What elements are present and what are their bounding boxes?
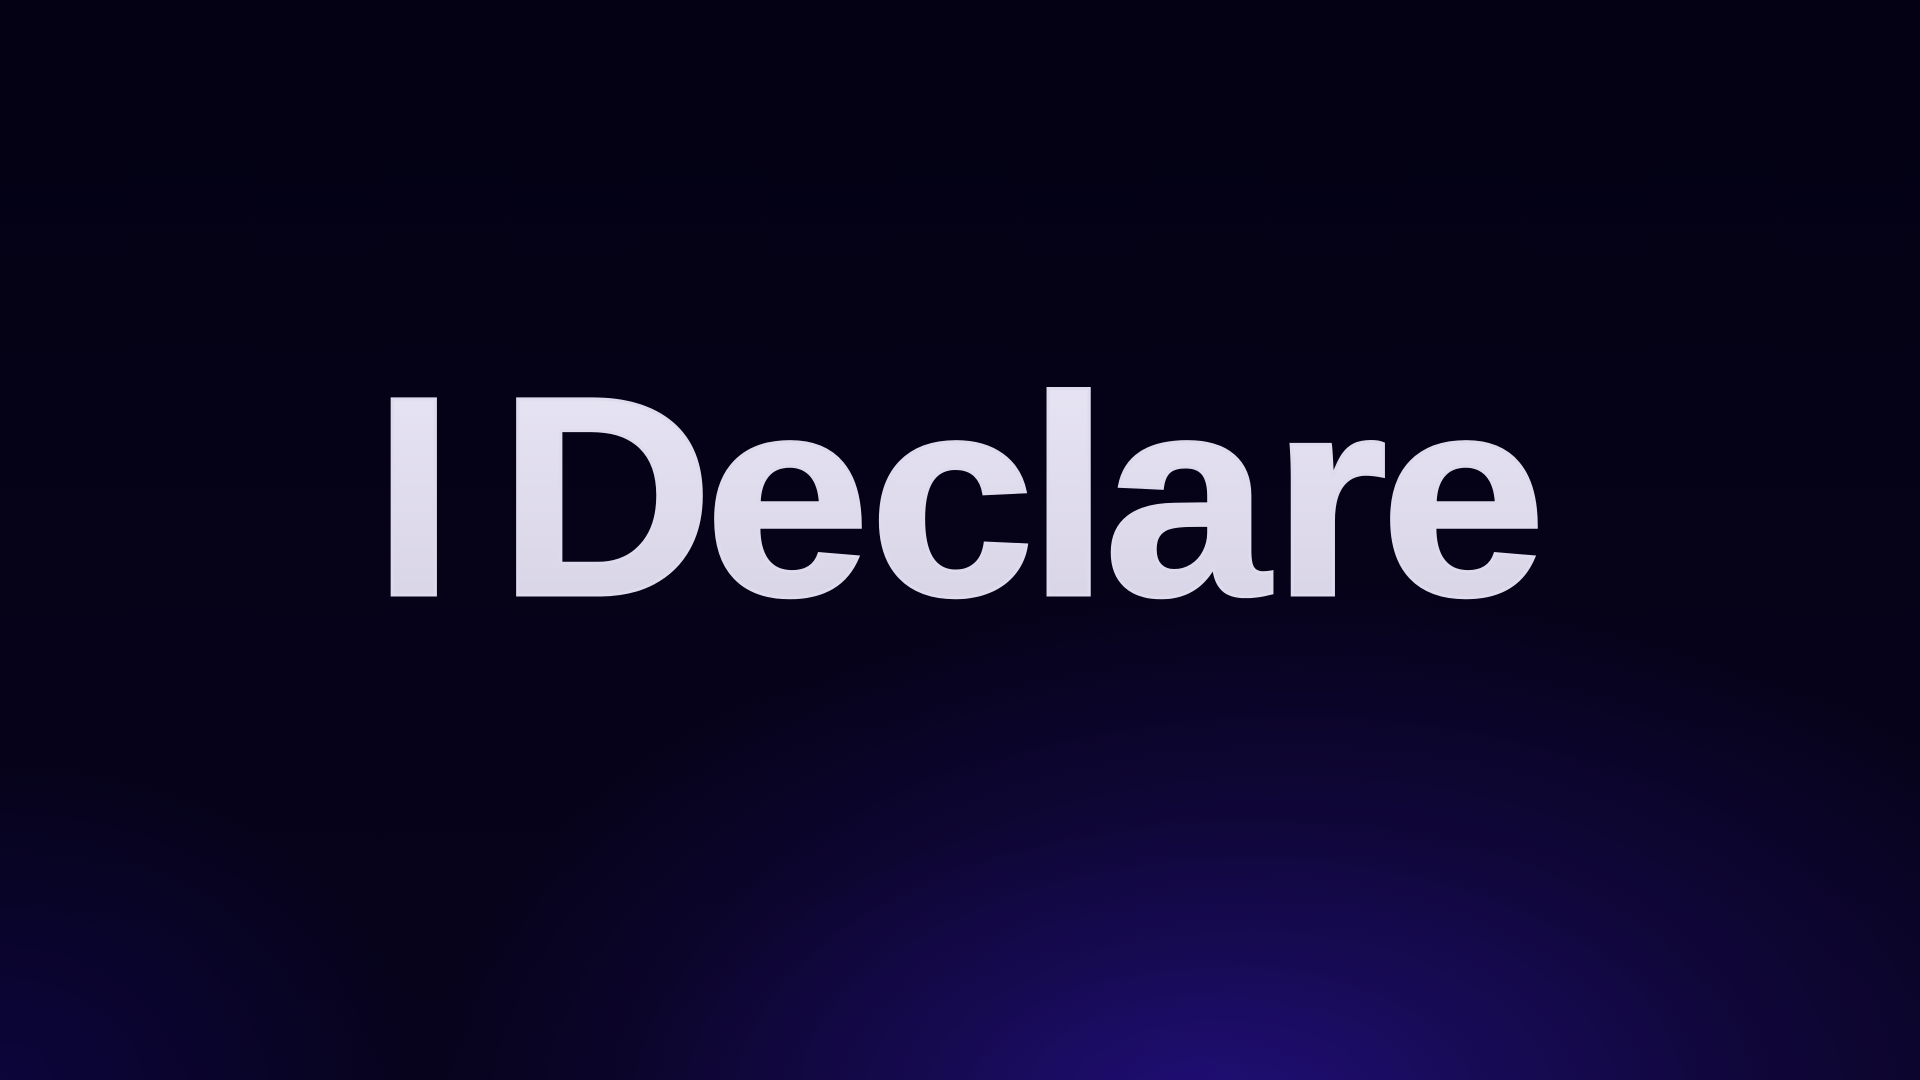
title: I Declare (372, 337, 1546, 655)
